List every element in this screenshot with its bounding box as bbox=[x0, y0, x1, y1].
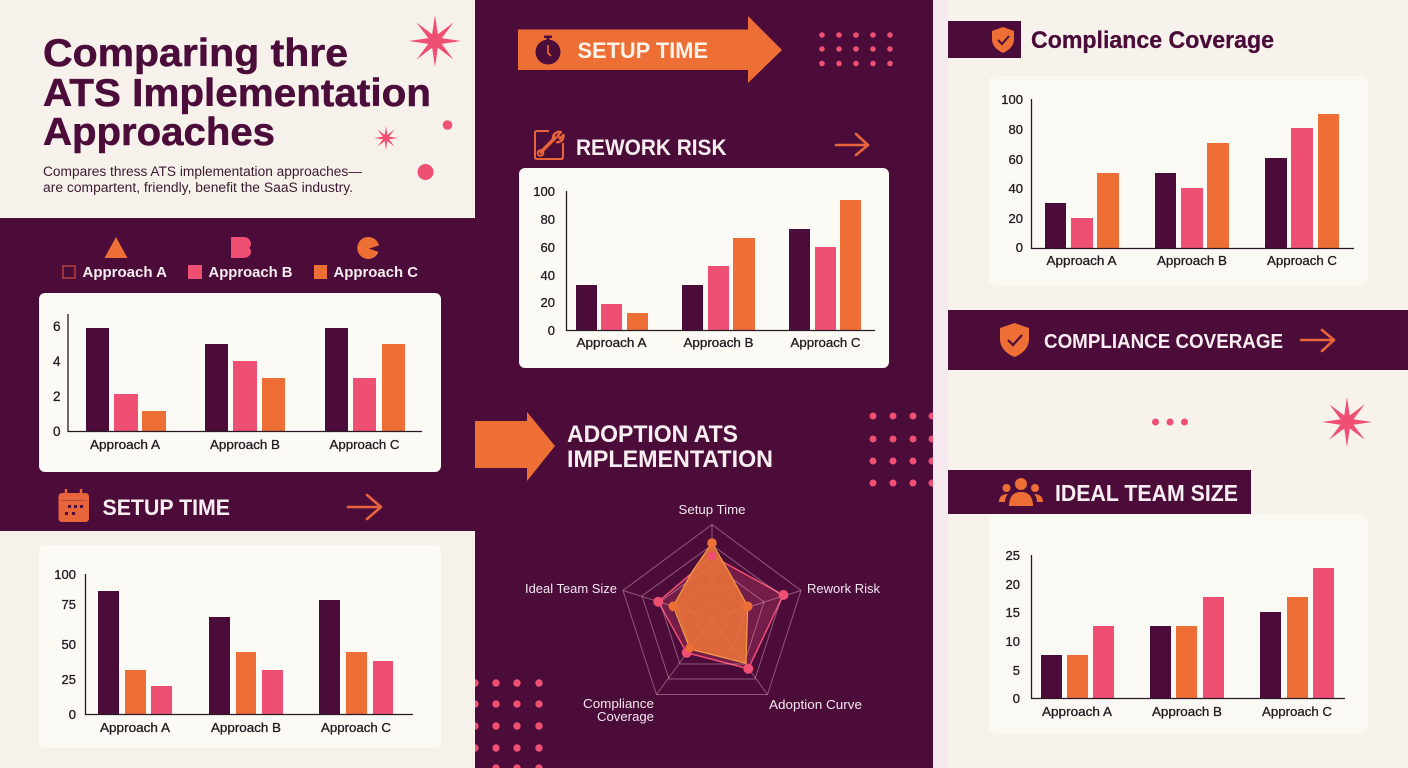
title: Comparing thre bbox=[43, 32, 348, 75]
panel: right column bbox=[933, 0, 1408, 768]
bar chart: setup time: 0 bbox=[69, 707, 76, 722]
bar chart: ideal team size: Approach A bbox=[1042, 704, 1112, 719]
subtitle text: Compares thress ATS implementation approaches— bbox=[43, 164, 362, 179]
bar chart: approach scores: 2 bbox=[53, 389, 61, 404]
icon: wrench bbox=[535, 131, 564, 159]
icon: stopwatch bbox=[536, 36, 560, 64]
bar chart: rework risk: Approach B bbox=[684, 335, 754, 350]
bar chart: rework risk bbox=[519, 168, 889, 368]
bar chart: ideal team size: 5 bbox=[1013, 663, 1020, 678]
radar chart: Ideal Team Size bbox=[525, 582, 617, 596]
bar chart: rework risk: Approach A bbox=[576, 335, 647, 350]
arrow banner: setup time: SETUP TIME bbox=[578, 38, 708, 63]
dot grid: bottom left bbox=[471, 679, 543, 768]
bar chart: compliance coverage: 100 bbox=[1001, 92, 1023, 107]
bar chart: setup time: Approach A bbox=[100, 720, 170, 735]
heading tab: compliance coverage bbox=[948, 21, 1274, 58]
bar chart: ideal team size: 25 bbox=[1006, 548, 1020, 563]
arrow: compliance bbox=[1301, 330, 1334, 351]
heading: adoption ats implementation: IMPLEMENTATION bbox=[567, 446, 773, 473]
radar chart: Compliance bbox=[583, 697, 654, 711]
icon: team bbox=[999, 478, 1043, 506]
band: ideal team size: IDEAL TEAM SIZE bbox=[1055, 480, 1238, 506]
heading tab: compliance coverage: Compliance Coverage bbox=[1031, 27, 1274, 54]
subtitle text bbox=[43, 164, 362, 195]
legend: Approach A bbox=[82, 265, 168, 281]
bar chart: setup time: Approach B bbox=[211, 720, 281, 735]
legend bbox=[63, 265, 419, 281]
bar chart: approach scores: 6 bbox=[53, 319, 61, 334]
bar chart: rework risk: 20 bbox=[541, 295, 555, 310]
bar chart: ideal team size: 0 bbox=[1013, 691, 1020, 706]
icon: shield bbox=[992, 27, 1014, 53]
bar chart: ideal team size bbox=[989, 515, 1368, 733]
bar chart: compliance coverage: 80 bbox=[1009, 122, 1023, 137]
bar chart: compliance coverage: 40 bbox=[1009, 181, 1023, 196]
radar chart: Coverage bbox=[597, 710, 654, 724]
band: ideal team size bbox=[948, 470, 1251, 514]
bar chart: compliance coverage: 20 bbox=[1009, 211, 1023, 226]
bar chart: rework risk: 100 bbox=[533, 184, 555, 199]
bar chart: setup time: 50 bbox=[62, 637, 76, 652]
bar chart: setup time: 100 bbox=[54, 567, 76, 582]
arrow: setup time bbox=[348, 495, 381, 519]
band: compliance coverage bbox=[948, 310, 1408, 370]
bar chart: ideal team size: 20 bbox=[1006, 577, 1020, 592]
bar chart: setup time: 75 bbox=[62, 597, 76, 612]
bar chart: compliance coverage bbox=[989, 76, 1368, 285]
decorative stars and dots bbox=[374, 15, 461, 180]
dot grid: top bbox=[819, 32, 893, 66]
bar chart: ideal team size: Approach B bbox=[1152, 704, 1222, 719]
legend: Approach B bbox=[208, 265, 292, 281]
bar chart: setup time: 25 bbox=[62, 672, 76, 687]
bar chart: ideal team size: 10 bbox=[1006, 634, 1020, 649]
heading: adoption ats implementation bbox=[567, 421, 773, 473]
legend: Approach C bbox=[334, 265, 419, 281]
heading: setup time: SETUP TIME bbox=[102, 495, 230, 520]
heading: rework risk: REWORK RISK bbox=[576, 135, 727, 160]
title bbox=[43, 32, 431, 154]
subtitle text: are compartent, friendly, benefit the SaaS industry. bbox=[43, 180, 353, 195]
radar chart: Setup Time bbox=[678, 503, 746, 517]
icon: calendar bbox=[58, 490, 89, 522]
arrow: adoption bbox=[475, 412, 555, 481]
bar chart: setup time: Approach C bbox=[321, 720, 391, 735]
bar chart: compliance coverage: 60 bbox=[1009, 152, 1023, 167]
decorative dots bbox=[1152, 418, 1188, 426]
bar chart: approach scores: Approach C bbox=[330, 437, 400, 452]
title: Approaches bbox=[43, 111, 275, 154]
panel: left column bbox=[0, 0, 475, 768]
panel: center column bbox=[471, 0, 936, 768]
title: ATS Implementation bbox=[43, 72, 431, 115]
arrow banner: setup time bbox=[518, 16, 782, 83]
radar chart bbox=[525, 503, 881, 724]
bar chart: rework risk: 80 bbox=[541, 212, 555, 227]
bar chart: compliance coverage: Approach C bbox=[1267, 253, 1337, 268]
dot grid: right bbox=[870, 412, 936, 486]
bar chart: rework risk: 60 bbox=[541, 240, 555, 255]
icon: shield bbox=[1000, 323, 1029, 357]
band: compliance coverage: COMPLIANCE COVERAGE bbox=[1044, 331, 1283, 353]
bar chart: ideal team size: Approach C bbox=[1262, 704, 1332, 719]
bar chart: approach scores: Approach B bbox=[210, 437, 280, 452]
bar chart: approach scores: 4 bbox=[53, 354, 61, 369]
bar chart: rework risk: 0 bbox=[548, 323, 555, 338]
bar chart: approach scores: Approach A bbox=[90, 437, 160, 452]
bar chart: compliance coverage: Approach B bbox=[1157, 253, 1227, 268]
bar chart: ideal team size: 15 bbox=[1006, 605, 1020, 620]
arrow: rework risk bbox=[836, 134, 868, 155]
radar chart: Rework Risk bbox=[807, 582, 881, 596]
bar chart: approach scores: 0 bbox=[53, 424, 61, 439]
heading: adoption ats implementation: ADOPTION ATS bbox=[567, 421, 738, 448]
decorative star bbox=[1322, 397, 1372, 447]
bar chart: approach scores bbox=[39, 293, 441, 472]
bar chart: rework risk: Approach C bbox=[790, 335, 860, 350]
bar chart: setup time bbox=[39, 545, 441, 748]
legend icons bbox=[104, 237, 379, 259]
bar chart: rework risk: 40 bbox=[541, 268, 555, 283]
bar chart: compliance coverage: 0 bbox=[1016, 240, 1023, 255]
radar chart: Adoption Curve bbox=[769, 698, 862, 712]
bar chart: compliance coverage: Approach A bbox=[1046, 253, 1117, 268]
